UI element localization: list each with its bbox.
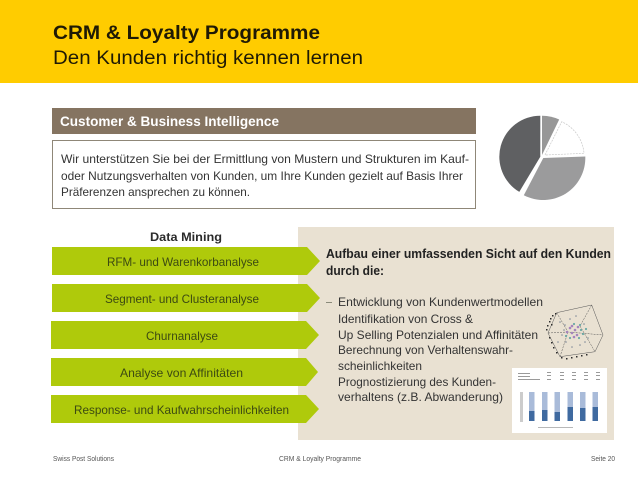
subtitle: Den Kunden richtig kennen lernen xyxy=(53,47,363,69)
text block: heading Aufbau xyxy=(326,247,611,278)
chart: stacked bar chart xyxy=(512,368,607,433)
arrow: Response- und Kaufwahrscheinlichkeiten: Response- und Kaufwahrscheinlichkeiten xyxy=(74,403,289,417)
arrow: Response- und Kaufwahrscheinlichkeiten xyxy=(51,395,319,423)
footer: left: Swiss Post Solutions xyxy=(53,454,114,463)
chart table xyxy=(518,372,600,428)
title: CRM & Loyalty Programme xyxy=(53,22,320,44)
text box: intro: oder Nutzungsverhalten von Kunden, um Ihre Kunden gezielt auf Basis Ihrer xyxy=(61,169,463,183)
bullet list: Berechnung von Verhaltenswahr- xyxy=(338,343,513,357)
bullet list: Identifikation von Cross & xyxy=(338,312,473,326)
header band xyxy=(0,0,638,83)
text box: intro: Wir unterstützen Sie bei der Ermittlung von Mustern und Strukturen im Kauf- xyxy=(61,152,469,166)
arrow: Segment- und Clusteranalyse xyxy=(52,284,320,312)
footer: center: CRM & Loyalty Programme xyxy=(279,454,361,463)
text block: heading Aufbau: durch die: xyxy=(326,264,384,278)
bullet list xyxy=(326,295,543,404)
bullet list: Entwicklung von Kundenwertmodellen xyxy=(338,295,543,309)
heading: Data Mining: Data Mining xyxy=(150,230,222,244)
arrow: Segment- und Clusteranalyse: Segment- und Clusteranalyse xyxy=(105,292,259,306)
icon: 3D scatter plot xyxy=(546,305,603,360)
section heading: Customer & Business Intelligence xyxy=(52,108,476,134)
footer: page number: Seite 20 xyxy=(591,454,615,463)
bullet list: verhaltens (z.B. Abwanderung) xyxy=(338,390,503,404)
arrow: RFM- und Warenkorbanalyse xyxy=(52,247,320,275)
section heading: Customer & Business Intelligence: Customer & Business Intelligence xyxy=(60,114,279,129)
arrow: RFM- und Warenkorbanalyse: RFM- und Warenkorbanalyse xyxy=(107,255,259,269)
arrow: Analyse von Affinitäten: Analyse von Affinitäten xyxy=(120,366,243,380)
pie chart xyxy=(499,116,585,200)
bullet list: scheinlichkeiten xyxy=(338,359,422,373)
arrow: Analyse von Affinitäten xyxy=(51,358,318,386)
text block: heading Aufbau: Aufbau einer umfassenden Sicht auf den Kunden xyxy=(326,247,611,261)
text box: intro xyxy=(52,140,476,208)
arrow: Churnanalyse: Churnanalyse xyxy=(146,329,218,343)
text box: intro: Präferenzen ansprechen zu können. xyxy=(61,185,250,199)
arrow: Churnanalyse xyxy=(51,321,319,349)
bullet list: Prognostizierung des Kunden- xyxy=(338,375,496,389)
bullet list: Up Selling Potenzialen und Affinitäten xyxy=(338,328,538,342)
panel: beige background xyxy=(298,227,614,440)
